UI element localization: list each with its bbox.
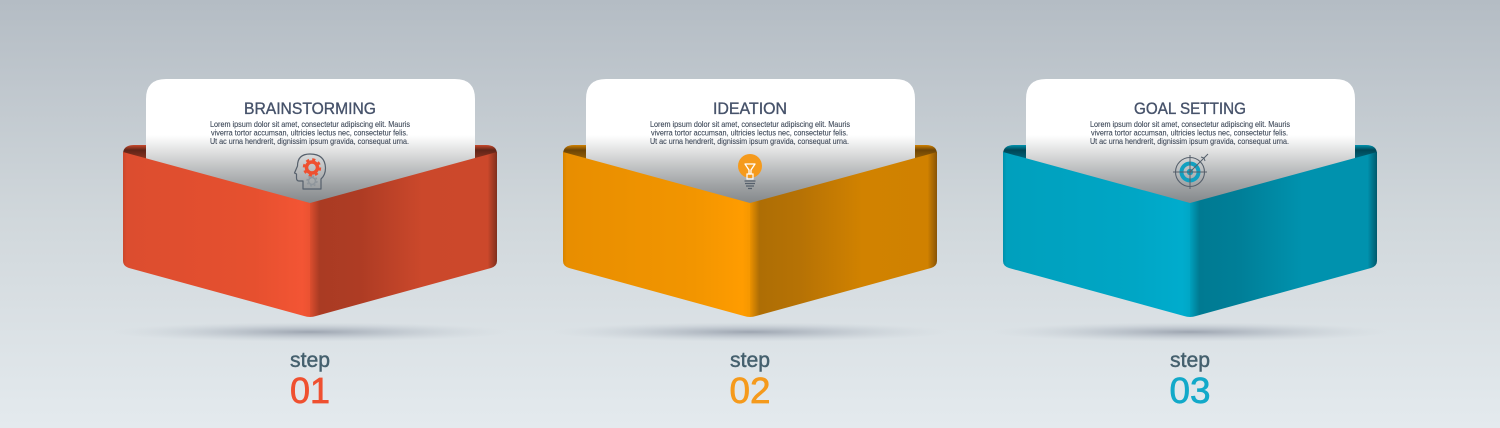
floor shadow 2 xyxy=(552,322,948,342)
floor shadow 1 xyxy=(112,322,508,342)
step label 3: step xyxy=(1170,349,1210,372)
icon: head with gears xyxy=(294,154,326,189)
text block 2 xyxy=(650,120,850,146)
text block 2: Lorem ipsum dolor sit amet, consectetur adipiscing elit. Mauris xyxy=(650,120,850,129)
heading: ideation: IDEATION xyxy=(713,99,787,118)
icon: target with arrow xyxy=(1173,154,1208,189)
text block 3 xyxy=(1090,120,1290,146)
step label 2: step xyxy=(730,349,770,372)
text block 3: Ut ac urna hendrerit, dignissim ipsum gravida, consequat urna. xyxy=(1090,137,1289,146)
card 3 xyxy=(1026,79,1355,210)
card 2 xyxy=(586,79,915,210)
step number 01: 01 xyxy=(290,370,330,411)
floor shadow 3 xyxy=(992,322,1388,342)
text block 2: viverra tortor accumsan, ultricies lectus nec, consectetur felis. xyxy=(651,128,848,138)
text block 1: Lorem ipsum dolor sit amet, consectetur adipiscing elit. Mauris xyxy=(210,120,410,129)
text block 1: Ut ac urna hendrerit, dignissim ipsum gravida, consequat urna. xyxy=(210,137,409,146)
step label 1: step xyxy=(290,349,330,372)
panel: step 2 ideation xyxy=(552,79,948,411)
text block 3: Lorem ipsum dolor sit amet, consectetur adipiscing elit. Mauris xyxy=(1090,120,1290,129)
heading: brainstorming: BRAINSTORMING xyxy=(244,99,376,118)
ribbon back fold 1 xyxy=(123,145,497,162)
step number 03: 03 xyxy=(1170,370,1210,411)
text block 1 xyxy=(210,120,410,146)
heading: goal setting: GOAL SETTING xyxy=(1134,99,1246,118)
step number 02: 02 xyxy=(730,370,770,411)
ribbon front 1 xyxy=(123,152,497,317)
text block 1: viverra tortor accumsan, ultricies lectus nec, consectetur felis. xyxy=(211,128,408,138)
panel: step 3 goal setting xyxy=(992,79,1388,411)
card 1 xyxy=(146,79,475,210)
ribbon front 2 xyxy=(563,152,937,317)
text block 2: Ut ac urna hendrerit, dignissim ipsum gravida, consequat urna. xyxy=(650,137,849,146)
panel: step 1 brainstorming xyxy=(112,79,508,411)
ribbon back fold 2 xyxy=(563,145,937,162)
ribbon back fold 3 xyxy=(1003,145,1377,162)
icon: light bulb xyxy=(738,154,762,188)
text block 3: viverra tortor accumsan, ultricies lectus nec, consectetur felis. xyxy=(1091,128,1288,138)
ribbon front 3 xyxy=(1003,152,1377,317)
